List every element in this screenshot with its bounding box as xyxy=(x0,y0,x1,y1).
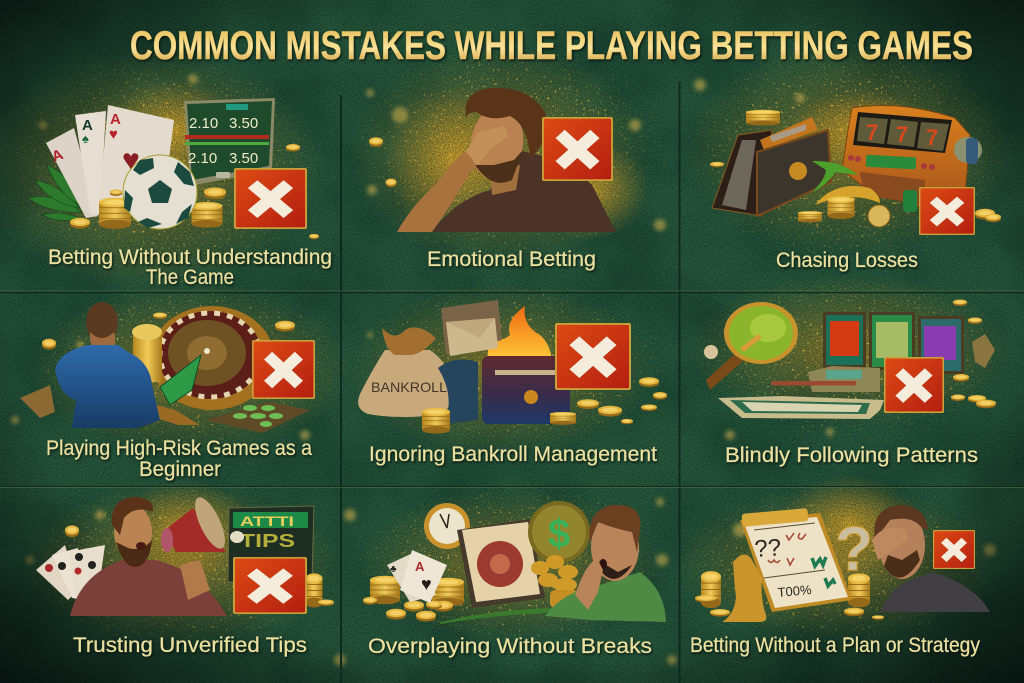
icon: odds screen: 2.10 xyxy=(189,115,218,132)
label xyxy=(46,437,312,481)
label: Blindly Following Patterns xyxy=(725,444,978,467)
icon: wallet xyxy=(712,110,831,216)
icon: playing cards xyxy=(36,545,105,600)
icon: chips board xyxy=(205,402,310,433)
icon: green ribbon xyxy=(440,608,590,624)
icon: envelope xyxy=(441,300,502,356)
icon: playing cards: A xyxy=(82,117,93,134)
icon: loose coins xyxy=(20,312,295,418)
icon: red x xyxy=(252,340,315,399)
icon: clipboard: T00% xyxy=(777,582,813,600)
icon: coins xyxy=(363,576,464,622)
panel: overplaying without breaks xyxy=(363,501,666,658)
icon: playing cards: A xyxy=(415,559,425,574)
icon: red x xyxy=(233,557,307,614)
label: Beginner xyxy=(139,458,221,481)
icon: playing cards: ♠ xyxy=(82,131,89,146)
icon: green leaves xyxy=(28,165,84,220)
icon: dollar coin xyxy=(528,501,590,563)
icon: red x xyxy=(542,117,613,181)
icon: bankroll bag xyxy=(358,327,454,417)
icon: soccer ball xyxy=(123,155,197,229)
icon: clipboard: ?? xyxy=(754,534,782,563)
panel: playing high-risk games as a beginner xyxy=(20,302,315,481)
icon: man from behind xyxy=(55,302,160,428)
icon: facepalm man xyxy=(872,505,990,612)
icon: red x xyxy=(234,168,307,229)
label: Betting Without a Plan or Strategy xyxy=(690,634,980,657)
icon: coins xyxy=(695,571,884,620)
icon: slot machine: 7 xyxy=(926,125,938,150)
icon: odds screen: 2.10 xyxy=(188,150,217,167)
icon: shouting man xyxy=(70,497,227,616)
panel: betting without a plan or strategy xyxy=(690,505,990,657)
icon: stressed man xyxy=(397,88,616,232)
icon: coins xyxy=(70,144,319,239)
panel: ignoring bankroll management xyxy=(358,300,667,466)
icon: odds screen: 3.50 xyxy=(229,115,258,132)
icon: dollar coin: $ xyxy=(548,512,570,556)
icon: scroll xyxy=(954,137,982,164)
label: Overplaying Without Breaks xyxy=(368,635,652,658)
icon: magnifying glass xyxy=(704,302,798,390)
icon: slot machine xyxy=(842,106,970,212)
icon: fire xyxy=(488,306,552,365)
panel: blindly following patterns xyxy=(704,299,996,467)
icon: bankroll bag: BANKROLL xyxy=(371,379,447,395)
icon: coins xyxy=(422,377,667,434)
label: Ignoring Bankroll Management xyxy=(369,443,657,466)
icon: odds screen xyxy=(184,98,275,186)
label: Emotional Betting xyxy=(427,248,596,271)
icon: clipboard xyxy=(740,508,852,612)
icon: leaves and coins xyxy=(710,161,1001,227)
icon: green cash xyxy=(160,355,201,405)
panel: trusting unverified tips xyxy=(36,493,334,657)
icon: red x xyxy=(919,187,975,235)
icon: odds screen: 3.50 xyxy=(229,150,258,167)
icon: playing cards: ♣ xyxy=(390,564,397,575)
label: Playing High-Risk Games as a xyxy=(46,437,312,460)
icon: question mark: ? xyxy=(835,515,873,584)
icon: old book xyxy=(457,519,545,608)
icon: slot machine: 7 xyxy=(896,122,908,147)
icon: clock xyxy=(424,503,470,549)
label xyxy=(48,246,332,289)
icon: roulette wheel xyxy=(150,306,274,410)
label: The Game xyxy=(146,266,234,289)
icon: coins xyxy=(65,525,334,607)
icon: pattern frames xyxy=(823,312,964,374)
icon: gold nuggets xyxy=(531,555,578,608)
icon: notebook and pencil xyxy=(771,366,880,392)
label: Chasing Losses xyxy=(776,249,918,272)
icon: tired man xyxy=(545,505,666,622)
icon: chess knight xyxy=(722,554,766,622)
panel: chasing losses xyxy=(710,106,1001,272)
icon: blue pouch xyxy=(438,360,478,424)
icon: tips screen: ATTTI xyxy=(240,513,294,529)
icon: playing cards xyxy=(387,550,447,603)
icon: playing cards: ♥ xyxy=(421,574,432,594)
icon: coins xyxy=(369,137,396,187)
icon: red x xyxy=(884,357,944,413)
icon: red x xyxy=(555,323,631,390)
panel: emotional betting xyxy=(369,88,616,271)
icon: coins xyxy=(951,299,996,408)
icon: suitcase xyxy=(482,356,570,424)
icon: playing cards: ♥ xyxy=(122,144,140,177)
icon: playing cards xyxy=(46,105,174,218)
icon: tips screen xyxy=(228,506,314,582)
icon: slot machine: 7 xyxy=(866,120,878,145)
icon: playing cards: A xyxy=(110,111,121,128)
icon: playing cards: A xyxy=(50,146,66,166)
label: Betting Without Understanding xyxy=(48,246,332,269)
icon: megaphone xyxy=(161,493,244,553)
label: Trusting Unverified Tips xyxy=(73,634,307,657)
icon: board xyxy=(130,398,200,425)
icon: coin stack xyxy=(132,324,162,382)
icon: tips screen: TIPS xyxy=(240,531,295,551)
icon: playing cards: ♥ xyxy=(109,126,118,143)
icon: ticket xyxy=(718,396,884,419)
icon: red x xyxy=(933,530,975,569)
panel: betting without understanding the game xyxy=(28,98,332,289)
